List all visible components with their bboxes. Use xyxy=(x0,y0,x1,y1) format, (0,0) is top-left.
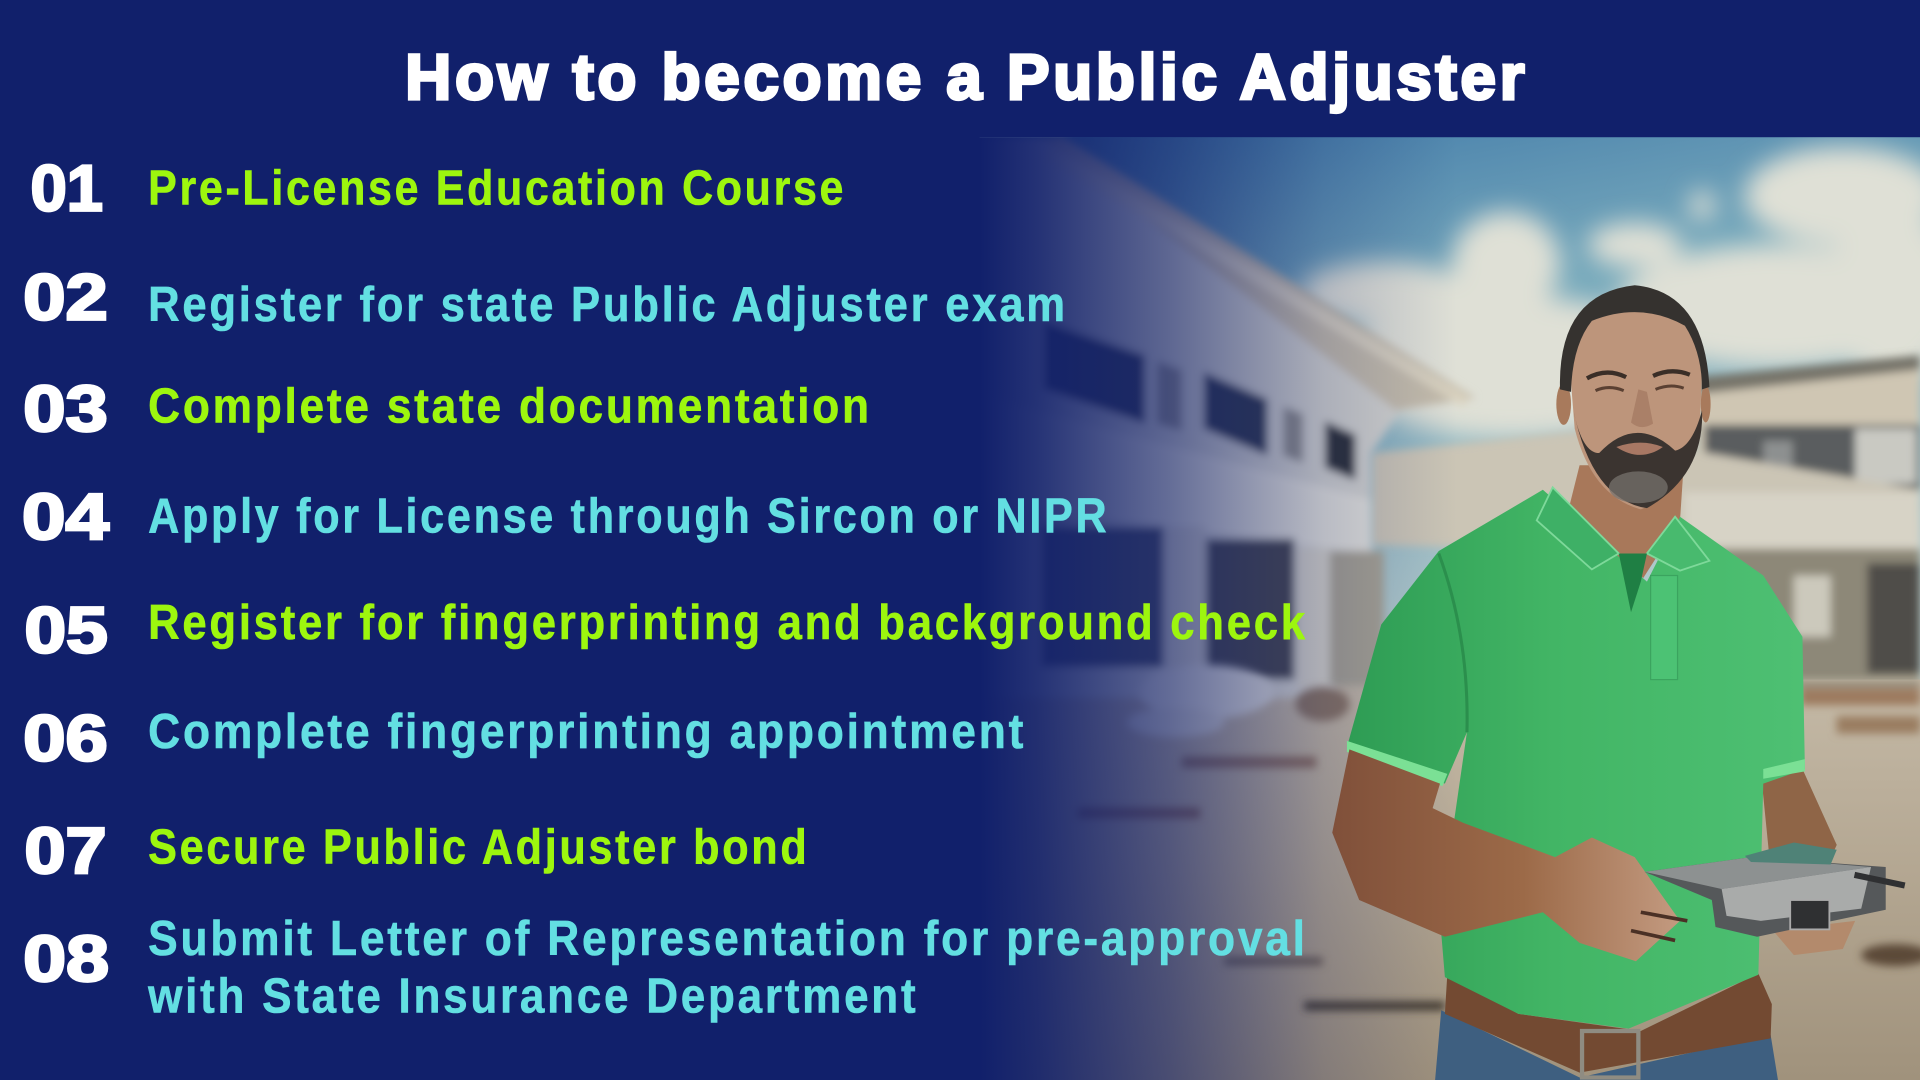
beard xyxy=(1573,410,1702,508)
step 05 text: Register for fingerprinting and background check xyxy=(148,596,1308,650)
collar xyxy=(1537,487,1709,612)
rubble and debris xyxy=(1078,665,1920,1010)
sleeve cuff left xyxy=(1347,741,1447,786)
sky xyxy=(980,137,1920,713)
figure: man holding controller xyxy=(1332,285,1905,1080)
ground xyxy=(980,680,1920,1080)
step list xyxy=(22,152,1308,1024)
step 04 number: 04 xyxy=(22,480,109,553)
step 01 number: 01 xyxy=(31,152,103,225)
background building right xyxy=(1371,355,1920,686)
sleeve seam xyxy=(1439,553,1467,732)
navy gradient fade over photo xyxy=(978,137,1468,1080)
step 08 number: 08 xyxy=(23,922,109,995)
step 03 number: 03 xyxy=(23,372,108,445)
step 07 text: Secure Public Adjuster bond xyxy=(148,820,809,874)
eyes xyxy=(1596,386,1684,391)
clouds xyxy=(1298,147,1920,438)
right forearm xyxy=(1760,759,1837,872)
nose xyxy=(1631,389,1653,427)
step 04 text: Apply for License through Sircon or NIPR xyxy=(148,490,1109,544)
step 02 text: Register for state Public Adjuster exam xyxy=(148,278,1068,332)
step 05 number: 05 xyxy=(24,594,108,667)
step 06 text: Complete fingerprinting appointment xyxy=(148,705,1026,759)
step 03 text: Complete state documentation xyxy=(148,379,872,433)
belt xyxy=(1445,973,1772,1073)
placket xyxy=(1651,576,1678,680)
step 01 text: Pre-License Education Course xyxy=(148,161,846,215)
step 02 number: 02 xyxy=(23,261,108,334)
step 07 number: 07 xyxy=(24,814,107,887)
step 06 number: 06 xyxy=(23,701,108,774)
panel: photo background scene xyxy=(967,137,1920,1080)
mouth xyxy=(1616,443,1663,455)
step 08 text: Submit Letter of Representation for pre-approval xyxy=(148,912,1308,966)
shirt xyxy=(1347,490,1805,1029)
foreground building xyxy=(967,137,1476,710)
neck xyxy=(1567,465,1684,578)
head xyxy=(1556,285,1711,509)
drone controller xyxy=(1644,842,1905,937)
sleeve cuff right xyxy=(1763,759,1805,779)
right hand xyxy=(1773,921,1855,955)
step 08 text xyxy=(147,912,1308,1024)
left forearm and hand xyxy=(1332,749,1680,961)
jeans xyxy=(1435,1010,1778,1080)
eyebrows xyxy=(1587,373,1626,378)
belt buckle xyxy=(1582,1031,1638,1078)
finger lines xyxy=(1631,912,1687,940)
title: How to become a Public Adjuster xyxy=(405,42,1524,113)
step 08 text: with State Insurance Department xyxy=(147,970,918,1024)
hair xyxy=(1560,285,1709,392)
